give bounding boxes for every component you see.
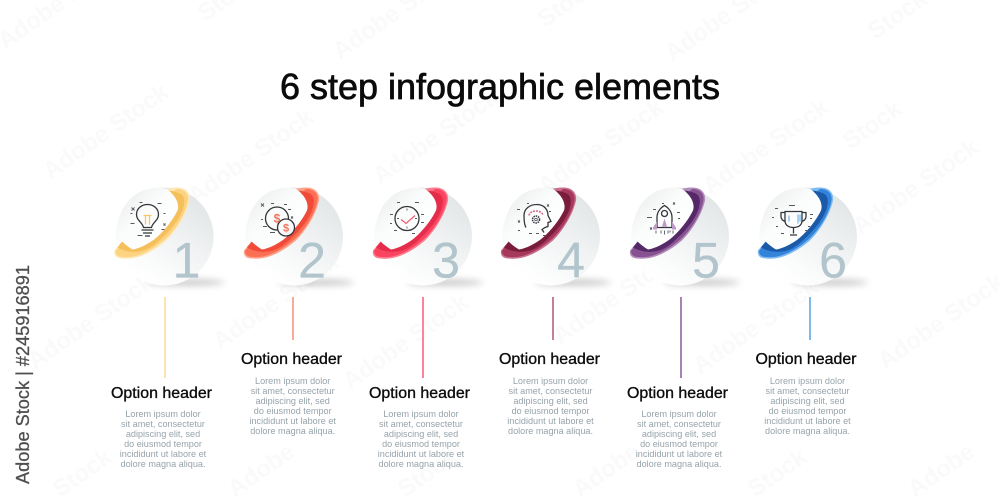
step 1 sphere [114, 188, 224, 288]
step 2 number: 2 [298, 232, 326, 288]
text block 1: do eiusmod tempor [124, 439, 202, 449]
watermark pattern: Adobe Stock [38, 78, 174, 185]
step 6 number: 6 [819, 232, 847, 288]
icon: head with gear [517, 204, 551, 236]
watermark pattern: Adobe Stock [533, 93, 669, 200]
text block 1: Option header [111, 385, 212, 402]
text block 3: dolore magna aliqua. [379, 459, 463, 469]
text block 2: Option header [241, 351, 342, 368]
text block 2: sit amet, consectetur [251, 386, 335, 396]
text block 5: do eiusmod tempor [640, 439, 718, 449]
text block 1: sit amet, consectetur [121, 419, 205, 429]
text block 4: dolore magna aliqua. [508, 426, 593, 436]
text block 3: adipiscing elit, sed [384, 429, 458, 439]
icon: rocket [647, 202, 680, 234]
watermark pattern: Adobe Stock [23, 268, 159, 375]
watermark pattern: Adobe Stock [848, 133, 984, 240]
step 1 number: 1 [173, 232, 200, 288]
icon: coins [261, 204, 294, 236]
text block 4: adipiscing elit, sed [513, 396, 588, 406]
text block 2 [241, 351, 342, 436]
title: 6 step infographic elements [280, 66, 720, 107]
connector line 3 [422, 297, 424, 378]
text block 2: do eiusmod tempor [254, 406, 332, 416]
connector line 6 [809, 297, 811, 340]
icon: coins: $ [283, 222, 289, 234]
step 4 ring [501, 188, 576, 259]
text block 5: Lorem ipsum dolor [641, 409, 717, 419]
text block 2: adipiscing elit, sed [256, 396, 330, 406]
watermark pattern: Adobe Stock [698, 93, 834, 200]
icon: light bulb [130, 202, 166, 236]
icon: trophy [772, 206, 813, 235]
step 5 number: 5 [692, 232, 720, 288]
text block 3: incididunt ut labore et [378, 449, 465, 459]
text block 4 [499, 351, 600, 436]
text block 1: adipiscing elit, sed [126, 429, 200, 439]
step 2 sphere [244, 188, 354, 288]
text block 2: Lorem ipsum dolor [255, 376, 330, 386]
text block 5: Option header [627, 385, 728, 402]
text block 5: dolore magna aliqua. [637, 459, 721, 469]
text block 2: dolore magna aliqua. [250, 426, 335, 436]
text block 4: Option header [499, 351, 600, 368]
watermark pattern: Adobe Stock [548, 243, 684, 350]
text block 6: adipiscing elit, sed [770, 396, 845, 406]
step 4 number: 4 [557, 232, 585, 288]
text block 6: do eiusmod tempor [769, 406, 846, 416]
text block 6: Option header [756, 351, 856, 368]
step 3 sphere [373, 188, 483, 288]
step 4 sphere [501, 188, 611, 288]
step 3 ring [373, 188, 448, 259]
text block 6: incididunt ut labore et [764, 416, 851, 426]
icon: clock [390, 202, 424, 234]
connector line 2 [292, 297, 294, 340]
text block 6: dolore magna aliqua. [765, 426, 850, 436]
step 2 ring [244, 188, 319, 259]
step 3 number: 3 [432, 232, 460, 288]
text block 4: Lorem ipsum dolor [513, 376, 588, 386]
step 6 sphere [758, 188, 868, 288]
step 6 ring [758, 188, 833, 259]
text block 3: do eiusmod tempor [382, 439, 460, 449]
text block 1: Lorem ipsum dolor [125, 409, 201, 419]
text block 1: incididunt ut labore et [120, 449, 207, 459]
text block 5: incididunt ut labore et [636, 449, 723, 459]
stock id label: Adobe Stock | #245916891 [13, 265, 33, 484]
text block 3: sit amet, consectetur [379, 419, 463, 429]
text block 3: Lorem ipsum dolor [383, 409, 459, 419]
watermark pattern: Adobe Stock [208, 248, 344, 355]
text block 4: sit amet, consectetur [509, 386, 592, 396]
text block 5: adipiscing elit, sed [642, 429, 716, 439]
connector line 1 [164, 297, 166, 378]
text block 4: incididunt ut labore et [507, 416, 594, 426]
connector line 4 [552, 297, 554, 340]
text block 2: incididunt ut labore et [249, 416, 336, 426]
watermark pattern: Adobe Stock [688, 273, 824, 380]
step 1 ring [114, 188, 190, 259]
text block 6: Lorem ipsum dolor [770, 376, 845, 386]
text block 3: Option header [369, 385, 470, 402]
connector line 5 [680, 297, 682, 378]
step 5 ring [630, 188, 705, 259]
watermark pattern: Adobe Stock [338, 288, 474, 395]
text block 3 [369, 385, 470, 469]
text block 4: do eiusmod tempor [512, 406, 589, 416]
step 5 sphere [630, 188, 740, 288]
watermark pattern: Stock [838, 95, 908, 155]
watermark pattern: Adobe Stock [368, 83, 504, 190]
watermark pattern: Adobe Stock [183, 103, 319, 210]
text block 1 [111, 385, 212, 469]
text block 6: sit amet, consectetur [766, 386, 849, 396]
text block 5 [627, 385, 728, 469]
text block 1: dolore magna aliqua. [121, 459, 205, 469]
icon: coins: $ [274, 212, 281, 226]
text block 5: sit amet, consectetur [637, 419, 721, 429]
text block 6 [756, 351, 856, 436]
